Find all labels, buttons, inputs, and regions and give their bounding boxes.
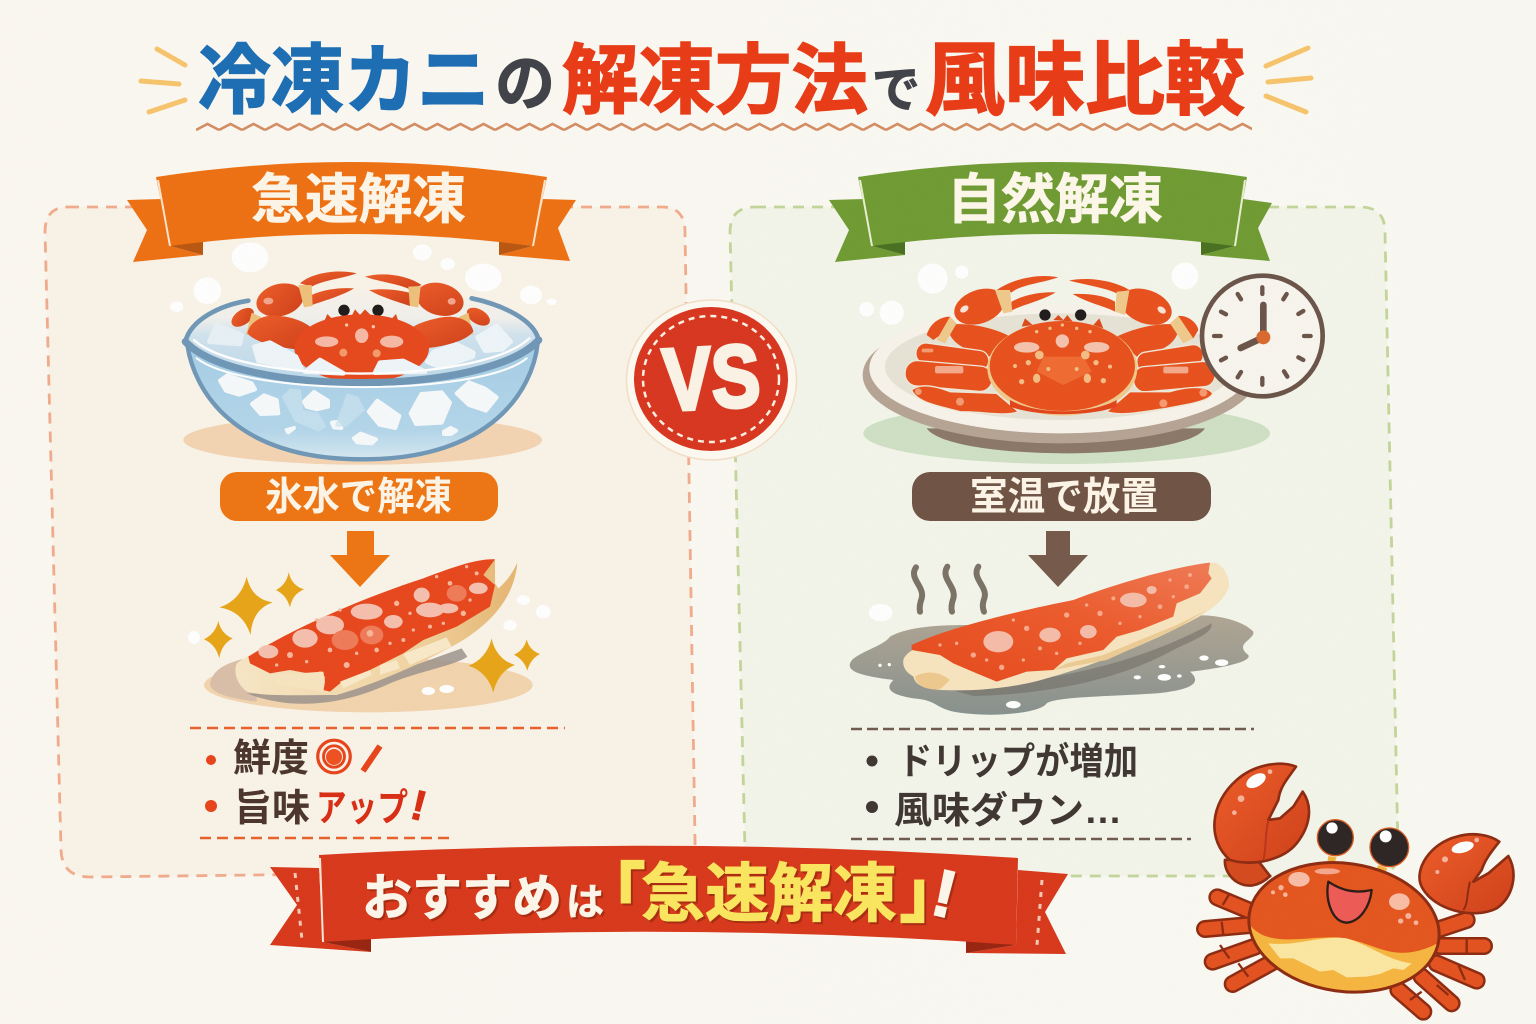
- arrow: natural thaw: [1028, 531, 1088, 587]
- body: [1247, 861, 1441, 994]
- title: 冷凍カニ: [198, 39, 490, 124]
- list: quick thaw benefits: ◎: [315, 738, 353, 780]
- list: quick thaw benefits: 旨味: [234, 788, 310, 830]
- label pill: 室温で放置: 室温で放置: [970, 476, 1158, 519]
- eyes: [1317, 820, 1409, 880]
- icon: title burst lines left: [141, 49, 185, 112]
- ice above rim: [209, 325, 511, 373]
- label pill: 氷水で解凍: [220, 472, 498, 521]
- bottom recommendation banner: おすすめ: [362, 870, 562, 926]
- glass body: [187, 343, 538, 459]
- title: の: [495, 50, 555, 119]
- bottom recommendation banner: 」: [900, 858, 964, 930]
- list: quick thaw benefits: アップ: [316, 788, 408, 830]
- bubbles: [859, 263, 1198, 325]
- sparkles: [204, 572, 540, 693]
- bottom recommendation banner: は: [566, 882, 604, 924]
- rim: [185, 298, 539, 387]
- right claw: [1420, 834, 1513, 913]
- label pill: 氷水で解凍: 氷水で解凍: [265, 476, 452, 519]
- crab in bowl: [228, 272, 493, 382]
- steam: [914, 567, 985, 612]
- panel: quick thaw: [45, 207, 695, 877]
- ribbon: 急速解凍: 急速解凍: [251, 170, 466, 230]
- crab on plate: [904, 276, 1216, 416]
- illustration: crab in ice water bowl: [170, 242, 557, 465]
- title: 解凍方法: [562, 39, 868, 124]
- bottom recommendation banner: [270, 846, 1068, 954]
- illustration: glistening crab leg: [188, 559, 551, 712]
- ribbon: 自然解凍: 自然解凍: [947, 170, 1163, 230]
- title: 風味比較: [925, 36, 1245, 125]
- list: natural thaw drawbacks: [851, 729, 1254, 839]
- illustration: crab on plate with clock: [859, 263, 1323, 464]
- VS badge: VS: [660, 326, 762, 429]
- illustration: dripping crab leg: [850, 563, 1253, 715]
- label pill: 室温で放置: [912, 472, 1211, 521]
- bottom recommendation banner: 急速解凍: [641, 858, 897, 930]
- list: natural thaw drawbacks: 風味ダウン…: [894, 790, 1122, 831]
- legs: [1205, 894, 1484, 1012]
- arrow: quick thaw: [330, 531, 390, 587]
- ribbon: 急速解凍: [127, 162, 576, 262]
- panel: natural thaw: [730, 207, 1398, 876]
- left claw: [1214, 764, 1309, 863]
- list: quick thaw benefits: !: [406, 781, 431, 830]
- list: quick thaw benefits: 鮮度: [233, 738, 309, 780]
- bottom recommendation banner: !: [926, 855, 964, 932]
- clock: [1202, 276, 1323, 396]
- bottom recommendation banner: 「: [581, 858, 645, 930]
- list: natural thaw drawbacks: ドリップが増加: [898, 741, 1138, 782]
- list: quick thaw benefits: [190, 728, 565, 838]
- mascot crab: [1205, 764, 1513, 1012]
- VS badge: [626, 300, 796, 460]
- title: [198, 36, 1245, 125]
- ribbon: 自然解凍: [829, 162, 1272, 262]
- bubbles: [170, 242, 557, 312]
- title: で: [872, 62, 920, 118]
- icon: title burst lines right: [1266, 48, 1311, 112]
